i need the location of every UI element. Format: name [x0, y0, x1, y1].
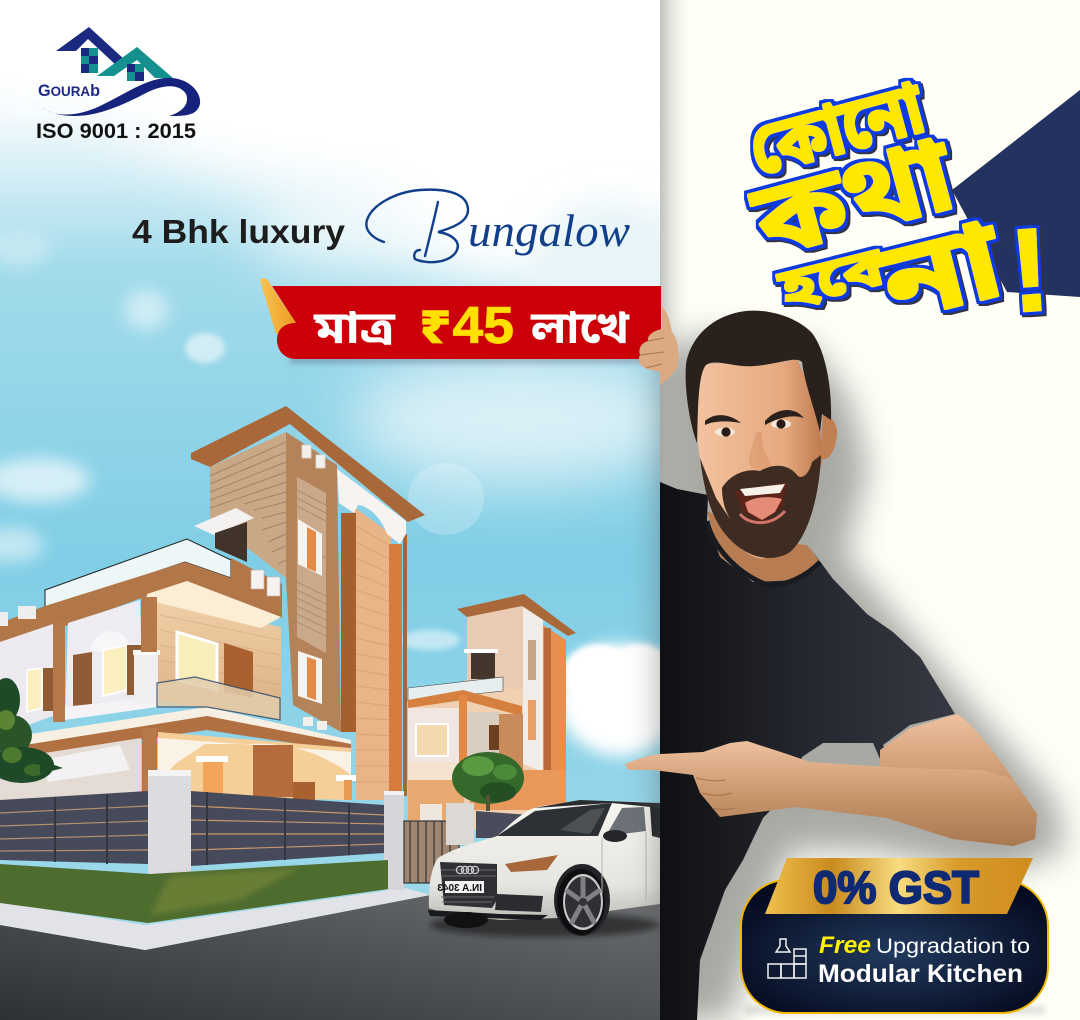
tower right face: [354, 507, 391, 800]
tree: [452, 752, 524, 811]
terrace: [408, 677, 503, 701]
tongue: [745, 497, 782, 520]
man shadow: [660, 335, 1065, 1020]
car shadow: [430, 913, 660, 937]
shirt: [660, 482, 955, 1020]
headline: কোনো কথা হবে না!: কথা: [740, 116, 967, 281]
balcony rail: [157, 677, 280, 720]
white wing: [65, 600, 143, 718]
icon: blue window: [81, 48, 98, 73]
badge: GST and kitchen offer: Modular Kitchen: [818, 960, 1023, 988]
badge shadow: [745, 1006, 1045, 1014]
hand finger creases: [696, 778, 735, 810]
red ribbon: [272, 286, 661, 359]
headline: কোনো কথা হবে না!: কোনো: [741, 65, 933, 191]
icon: modular kitchen: [768, 939, 806, 978]
gold ribbon: [765, 858, 1033, 914]
lower lip: [740, 511, 785, 523]
brand name: GOURAb: [38, 81, 100, 100]
eyes: [715, 419, 791, 437]
ground floor left: [0, 738, 141, 800]
ISO text: ISO 9001 : 2015: [36, 120, 196, 143]
illustration: car: [428, 800, 660, 937]
side windows: [606, 806, 660, 838]
right fence: [191, 791, 384, 866]
tower left face: [210, 432, 286, 578]
mirror: [603, 830, 627, 842]
hair: [686, 311, 831, 443]
icon: teal window: [127, 64, 144, 81]
window canopy: [194, 508, 254, 535]
price banner: ₹45: [418, 297, 514, 355]
tower window: [298, 519, 322, 576]
offer text: Free: [819, 932, 871, 959]
balcony wall: [157, 600, 281, 720]
tower roof: [191, 406, 425, 522]
upper arm: [860, 714, 1037, 846]
price banner: লাখে: [530, 302, 630, 353]
heading: Bungalow script: [366, 190, 630, 262]
balcony brown door: [224, 643, 253, 698]
man figure: [625, 307, 1037, 1020]
forearm and hand: [625, 741, 1037, 846]
badge: GST and kitchen offer: Upgradation to: [876, 935, 1030, 958]
right background panel: [660, 0, 1080, 1020]
illustration: main bungalow: [0, 406, 474, 923]
icon: swoosh: [37, 78, 200, 116]
white arch: [337, 469, 406, 544]
roof: [534, 800, 660, 808]
number plate: IN.A 3043: [437, 883, 482, 894]
shirt collar: [707, 521, 820, 585]
teeth: [740, 484, 785, 496]
icon: ribbon curl: [260, 278, 296, 334]
price text: মাত্র: [313, 302, 396, 353]
heading: Bungalow script: ungalow: [468, 205, 630, 256]
headline: কোনো কথা হবে না!: হবে: [772, 236, 891, 320]
gate: [404, 821, 459, 883]
ear: [820, 414, 837, 459]
headline: কোনো কথা হবে না!: !: [1006, 204, 1054, 338]
banner shadow: [290, 354, 650, 364]
tower pilaster: [286, 432, 341, 732]
beard: [700, 455, 821, 558]
headline: কোনো কথা হবে না!: [740, 65, 1054, 346]
man upper hand: [639, 307, 678, 385]
navy triangle: [952, 90, 1080, 297]
0% GST: 0% GST: [813, 862, 979, 913]
road and sidewalk: [0, 880, 660, 1020]
headlight: [505, 855, 558, 872]
heading: 4 Bhk luxury: 4 Bhk luxury: [132, 213, 346, 250]
logo: Gourab: [36, 27, 200, 143]
far wing: [0, 624, 53, 728]
illustration: second bungalow: [408, 594, 576, 838]
floor slab: [23, 707, 351, 746]
tower: [467, 606, 523, 690]
door lines: [602, 832, 646, 900]
eyebrows: [705, 410, 804, 425]
grille: [440, 862, 497, 908]
terrace band: [0, 558, 282, 645]
wing arch: [90, 631, 130, 652]
wheel arch: [554, 864, 610, 936]
front wheel: [444, 912, 488, 928]
ground floor porch: [158, 732, 351, 800]
car body: [429, 801, 660, 920]
lower intake: [495, 894, 543, 912]
fence: [476, 811, 530, 838]
price banner: [260, 278, 661, 364]
panel: sky: [0, 112, 660, 950]
icon: navy roof: [56, 27, 125, 66]
headline: কোনো কথা হবে না!: না: [867, 197, 1015, 346]
icon: teal roof: [97, 47, 173, 78]
left tree: [0, 678, 63, 783]
mouth: [735, 482, 787, 523]
nose shading: [749, 432, 772, 470]
left fence: [0, 791, 148, 864]
audi rings: [456, 866, 479, 874]
head: [696, 359, 822, 559]
rear wheel: [557, 869, 605, 935]
badge body: [741, 880, 1048, 1013]
badge: GST and kitchen offer: [741, 858, 1048, 1014]
balcony glass door: [177, 632, 217, 690]
neck: [707, 511, 820, 582]
fence pillars: [148, 770, 404, 890]
windshield: [497, 803, 612, 836]
terrace glass rail: [45, 539, 231, 609]
hedge: [0, 860, 388, 923]
